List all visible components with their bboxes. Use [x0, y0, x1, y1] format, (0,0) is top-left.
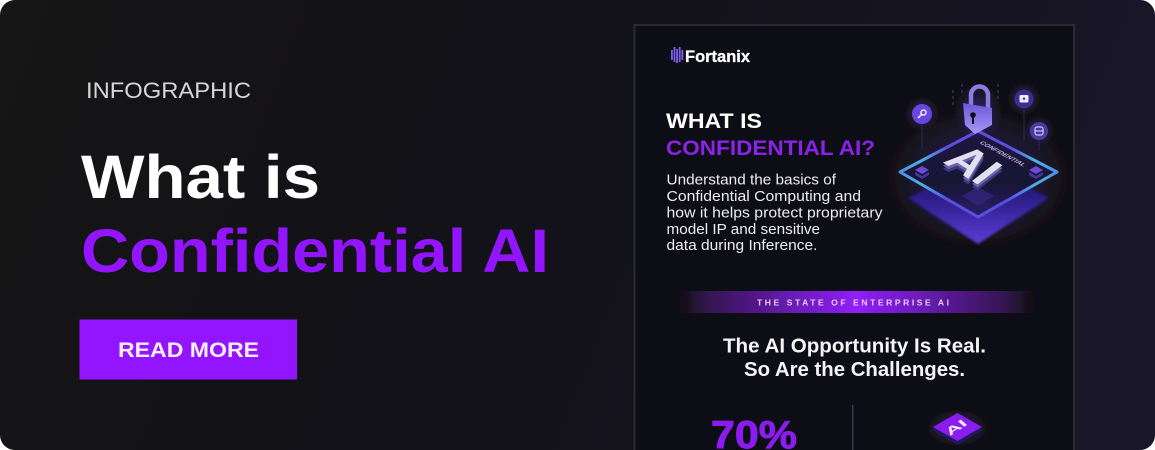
chip centre detail	[962, 187, 994, 206]
section heading: The AI Opportunity Is Real.	[723, 336, 986, 358]
section band: THE STATE OF ENTERPRISE AI	[757, 298, 949, 308]
intro paragraph: model IP and sensitive	[666, 222, 820, 238]
icon: Fortanix logo: Fortanix	[685, 47, 751, 66]
icon: padlock	[954, 84, 1002, 140]
chip corner nodes	[915, 166, 1043, 179]
read more button: READ MORE	[118, 338, 259, 362]
chip base layer	[908, 162, 1049, 244]
infographic title: CONFIDENTIAL AI?	[666, 137, 875, 160]
divider	[852, 405, 854, 450]
icon: shield bubble	[1008, 83, 1040, 140]
infographic title: WHAT IS	[666, 110, 762, 133]
main heading: Confidential AI	[81, 217, 549, 285]
chip AI lettering: AI	[934, 137, 1013, 192]
section heading: So Are the Challenges.	[744, 359, 965, 381]
icon: key bubble	[905, 97, 939, 150]
intro paragraph	[666, 172, 883, 254]
icon: database bubble	[1024, 116, 1054, 150]
intro paragraph: how it helps protect proprietary	[666, 206, 883, 222]
chip AI lettering: AI	[934, 140, 1013, 195]
intro paragraph: Understand the basics of	[666, 172, 837, 188]
icon: AI diamond: AI	[942, 417, 970, 438]
chip top plate	[900, 131, 1057, 217]
intro paragraph: data during Inference.	[666, 238, 818, 254]
main heading: What is	[81, 143, 320, 211]
eyebrow label: INFOGRAPHIC	[86, 78, 251, 103]
section band	[680, 291, 1033, 313]
intro paragraph: Confidential Computing and	[666, 189, 861, 205]
chip small label: CONFIDENTIAL	[977, 141, 1027, 167]
chip AI lettering: AI	[934, 143, 1013, 198]
main heading	[81, 143, 549, 285]
section heading	[723, 336, 986, 381]
illustration: AI chip with lock	[888, 83, 1068, 246]
data streaks around lock	[953, 84, 998, 108]
icon: AI diamond	[928, 410, 988, 446]
infographic title	[666, 110, 875, 160]
panel: infographic preview	[634, 25, 1074, 450]
read more button	[80, 320, 297, 380]
